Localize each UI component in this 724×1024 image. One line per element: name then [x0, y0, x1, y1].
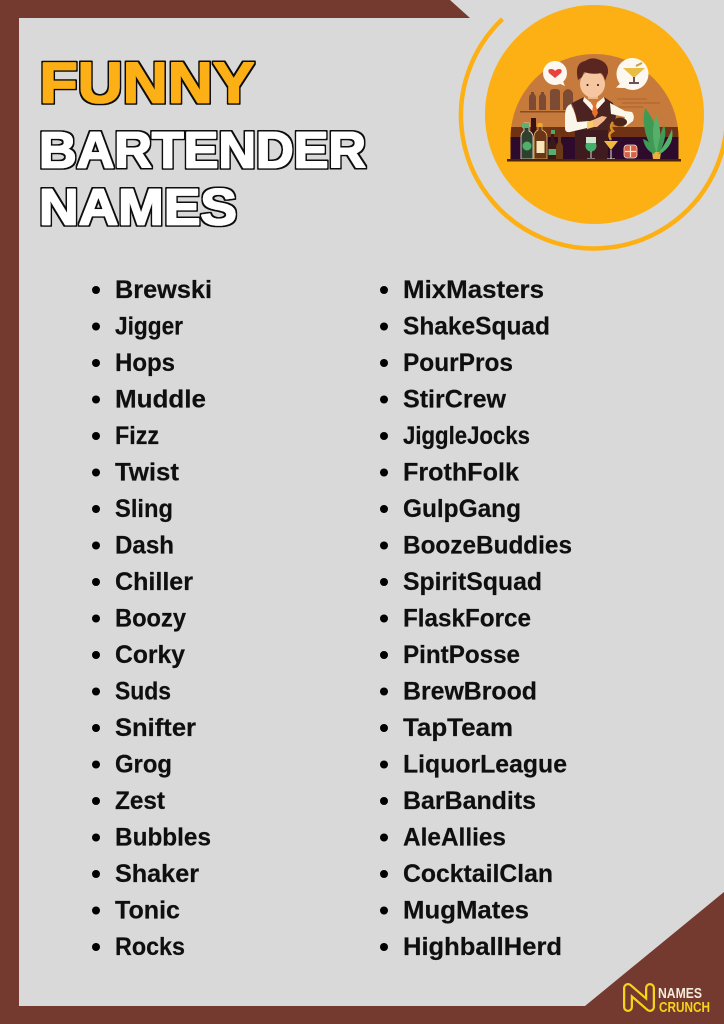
names list: left column: Corky: [115, 641, 185, 669]
pour stream: [609, 122, 613, 140]
names list: right column: BoozeBuddies: [403, 532, 572, 560]
names list: left column: Grog: [115, 750, 172, 778]
names list: left column: Rocks: [115, 933, 185, 961]
names list: right column: PintPosse: [403, 641, 520, 669]
names list: right column: JiggleJocks: [403, 422, 530, 450]
bottles on bar: [521, 118, 563, 159]
names list: right column: BarBandits: [403, 787, 536, 815]
names list: right column: PourPros: [403, 349, 513, 377]
names list: left column: Jigger: [115, 312, 183, 340]
title: FUNNY: [40, 52, 255, 116]
cuff and left hand: [587, 120, 594, 129]
speech bubble: cocktail: [616, 58, 648, 90]
bartender: [565, 58, 634, 160]
names list: right column: CocktailClan: [403, 860, 553, 888]
names list: left column: Boozy: [115, 604, 186, 632]
logo: Names Crunch: [628, 986, 710, 1016]
logo mark: [628, 988, 650, 1007]
right sleeve: [610, 103, 634, 127]
bar backdrop: [510, 54, 678, 159]
shelf bottles: [529, 89, 573, 110]
names list: left column: Hops: [115, 349, 175, 377]
names list: left column: Chiller: [115, 568, 193, 596]
names list: right column: BrewBrood: [403, 678, 537, 706]
names list: right column: ShakeSquad: [403, 312, 550, 340]
trousers: [575, 130, 608, 160]
logo: Names Crunch: CRUNCH: [659, 1000, 710, 1016]
vest: [572, 97, 616, 130]
yellow circle: [485, 5, 704, 224]
names list: left column: Zest: [115, 787, 166, 815]
names list: left column: Sling: [115, 495, 173, 523]
names list: left column: Snifter: [115, 714, 196, 742]
cocktail glasses: [586, 137, 637, 159]
names list: right column: [380, 276, 572, 961]
left sleeve: [565, 104, 589, 132]
speech bubble: heart: [543, 61, 567, 86]
names list: right column: HighballHerd: [403, 933, 562, 961]
hair: [577, 58, 608, 81]
names list: left column: Muddle: [115, 386, 206, 414]
title: [39, 52, 366, 236]
names list: left column: [92, 276, 212, 961]
names list: right column: TapTeam: [403, 714, 513, 742]
shirt collar and tie: [583, 97, 605, 113]
names list: left column: Bubbles: [115, 824, 211, 852]
names list: left column: Dash: [115, 532, 174, 560]
names list: right column: MixMasters: [403, 276, 544, 304]
names list: left column: Twist: [115, 458, 180, 486]
logo: Names Crunch: NAMES: [658, 986, 702, 1002]
illustration: bartender at bar: [505, 50, 685, 162]
title: NAMES: [39, 178, 237, 236]
names list: left column: Tonic: [115, 896, 180, 924]
neck and face: [588, 90, 598, 99]
shaker: [613, 118, 627, 126]
decorative ring arc: [461, 19, 724, 249]
names list: left column: Suds: [115, 678, 171, 706]
names list: left column: Fizz: [115, 422, 159, 450]
names list: right column: MugMates: [403, 896, 529, 924]
names list: right column: StirCrew: [403, 386, 507, 414]
names list: right column: LiquorLeague: [403, 750, 567, 778]
names list: right column: FrothFolk: [403, 458, 519, 486]
names list: right column: GulpGang: [403, 495, 521, 523]
potted plant: [643, 108, 672, 159]
names list: right column: SpiritSquad: [403, 568, 542, 596]
names list: left column: Shaker: [115, 860, 199, 888]
names list: right column: FlaskForce: [403, 604, 531, 632]
names list: right column: AleAllies: [403, 824, 506, 852]
bar counter line: [507, 159, 681, 162]
names list: left column: Brewski: [115, 276, 212, 304]
title: BARTENDER: [39, 122, 366, 178]
